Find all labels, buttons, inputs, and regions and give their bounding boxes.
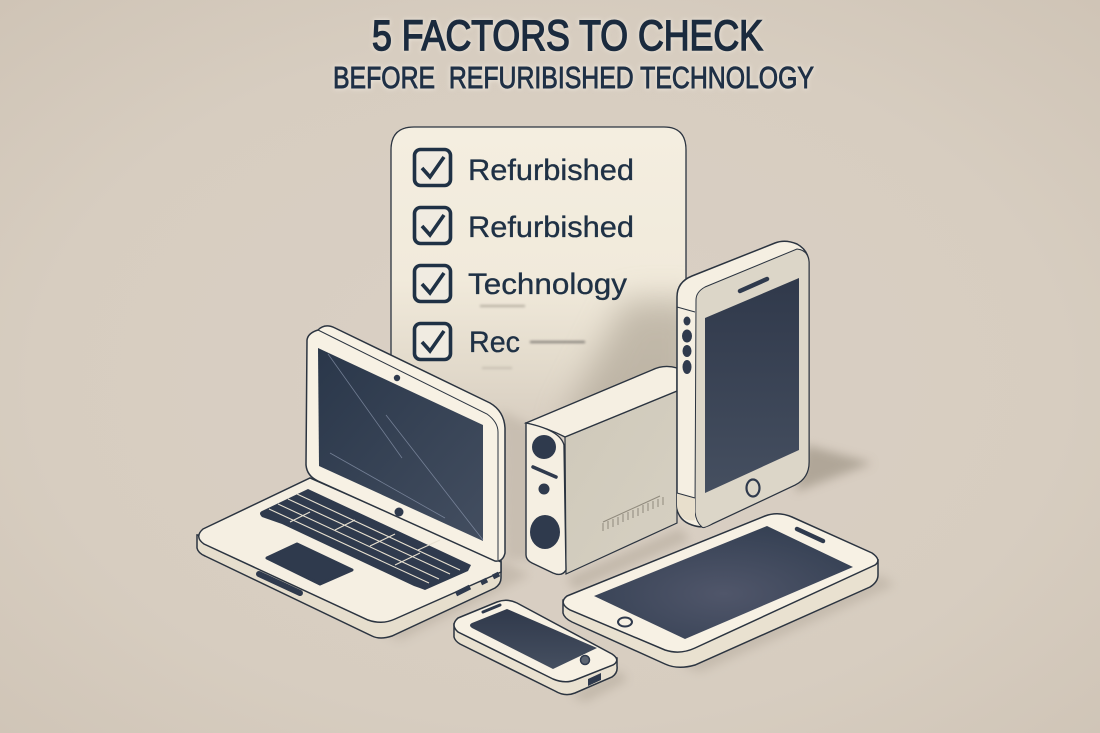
tablet speaker <box>797 529 823 541</box>
phone front <box>695 249 809 528</box>
checklist row 2 <box>414 208 634 244</box>
checklist row 3: Technology <box>468 268 627 301</box>
tablet top <box>563 514 878 652</box>
icon: speaker box <box>526 366 677 574</box>
small phone edge <box>454 624 617 695</box>
small phone speaker <box>483 605 500 612</box>
small phone screen <box>470 609 597 669</box>
box side <box>565 391 677 574</box>
title: 5 FACTORS TO CHECK <box>372 12 763 60</box>
checklist row 1: Refurbished <box>468 154 634 187</box>
laptop logo dot <box>394 508 404 516</box>
laptop screen <box>318 348 483 541</box>
laptop base top <box>199 478 501 622</box>
ground shadows <box>380 410 895 702</box>
laptop camera <box>394 375 400 381</box>
checklist row 1 <box>414 150 634 187</box>
tablet edge <box>563 560 878 667</box>
phone side buttons <box>684 316 690 326</box>
box front <box>526 423 566 574</box>
laptop lid <box>306 326 505 561</box>
laptop front slot <box>259 574 300 593</box>
laptop base side <box>197 535 501 638</box>
phone earpiece <box>740 279 767 291</box>
box vents <box>603 496 663 531</box>
shadow inside card <box>562 286 678 407</box>
checklist row 2: Refurbished <box>468 211 634 244</box>
phone home button <box>746 480 760 496</box>
checklist row 4 <box>414 324 585 369</box>
title <box>333 12 814 95</box>
checklist row 4: Rec <box>469 326 520 359</box>
icon: upright smartphone <box>677 241 809 528</box>
panel: checklist card <box>390 126 687 408</box>
laptop screen cracks <box>328 354 483 540</box>
small phone port <box>588 673 601 686</box>
laptop ports <box>456 574 499 594</box>
box top <box>526 366 677 437</box>
title: 5 FACTORS TO CHECK <box>372 12 763 60</box>
title: BEFORE REFURIBISHED TECHNOLOGY <box>333 60 814 95</box>
icon: laptop <box>197 326 505 638</box>
title: BEFORE REFURIBISHED TECHNOLOGY <box>333 60 814 95</box>
tablet button <box>618 618 632 626</box>
phone screen <box>705 278 799 493</box>
icon: small phone <box>454 600 617 695</box>
small phone top <box>454 600 617 682</box>
tablet screen <box>594 526 853 639</box>
phone body <box>677 241 809 527</box>
laptop keyboard <box>260 489 471 590</box>
small phone button <box>580 656 590 664</box>
icon: tablet <box>563 514 878 667</box>
checklist row 3 <box>414 266 627 307</box>
laptop touchpad <box>267 544 352 584</box>
